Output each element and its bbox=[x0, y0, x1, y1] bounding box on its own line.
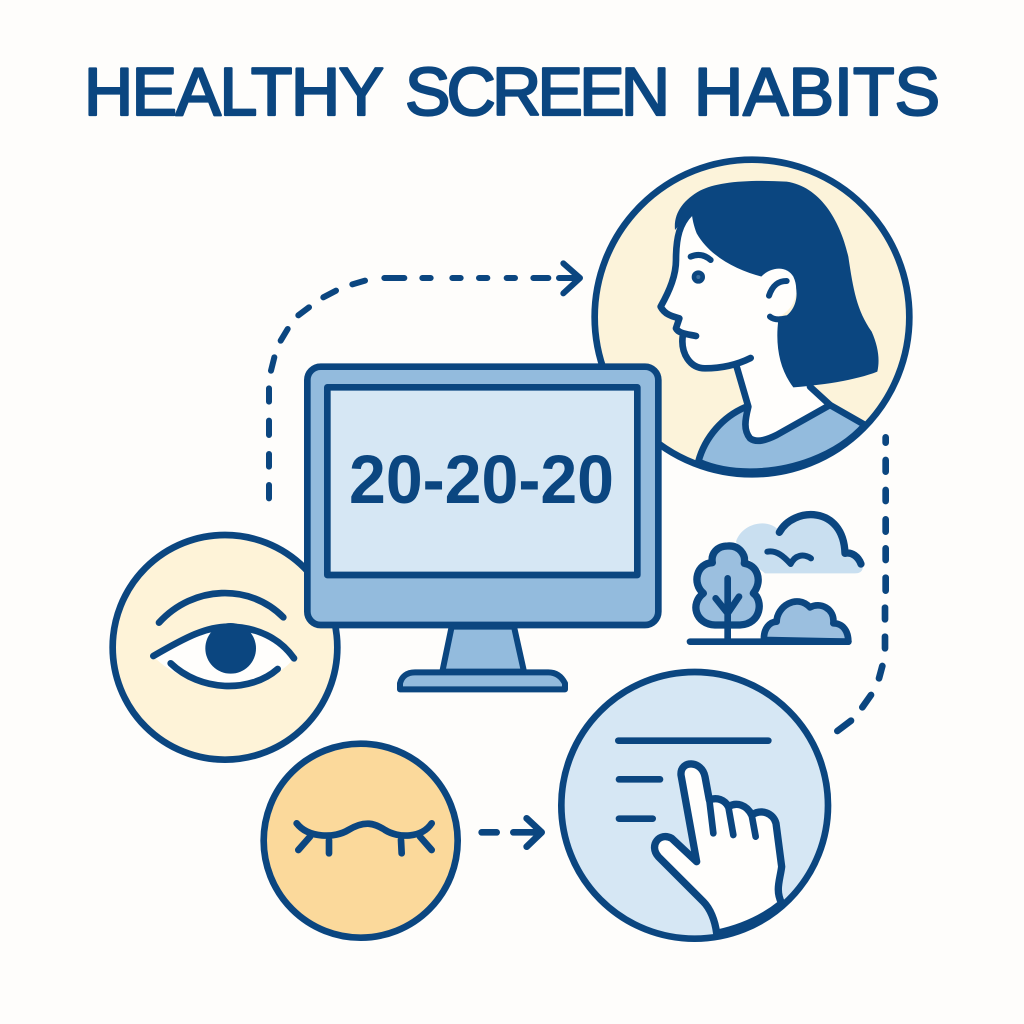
title: HABITS bbox=[694, 54, 940, 130]
closed eyelid and lashes bbox=[297, 823, 432, 853]
text lines bbox=[618, 741, 768, 819]
panel: person profile circle bbox=[595, 160, 909, 474]
face and neck bbox=[661, 213, 830, 441]
monitor base bbox=[400, 672, 565, 689]
hair bbox=[675, 181, 879, 387]
arrow: dashed path from monitor area to person bbox=[269, 263, 580, 498]
arrow: closed eye to hand bbox=[482, 818, 542, 847]
ear detail bbox=[769, 281, 787, 319]
panel: open eye circle bbox=[113, 535, 337, 760]
screen label: 20-20-20 bbox=[349, 441, 614, 518]
ear bbox=[761, 269, 796, 317]
hand bbox=[655, 764, 782, 933]
panel: monitor showing 20-20-20 bbox=[307, 367, 658, 689]
pupil bbox=[205, 623, 256, 674]
finger lines bbox=[709, 800, 756, 837]
bird bbox=[767, 551, 811, 564]
lower eyelid bbox=[171, 663, 278, 686]
icon: nature scene with tree, bush, cloud and bird bbox=[690, 515, 863, 642]
eyebrow bbox=[159, 593, 283, 623]
face outline bbox=[661, 213, 830, 441]
shirt bbox=[698, 405, 865, 472]
monitor stand bbox=[442, 627, 524, 672]
monitor screen bbox=[327, 387, 637, 575]
bush bbox=[764, 601, 848, 642]
upper eyelid bbox=[153, 627, 294, 658]
title: HEALTHY bbox=[84, 54, 384, 130]
eyebrow bbox=[691, 255, 711, 260]
cloud bbox=[736, 515, 863, 573]
tree trunk bbox=[716, 578, 739, 640]
cloud outline bbox=[779, 515, 861, 564]
panel: closed eye circle bbox=[264, 744, 542, 938]
title bbox=[84, 54, 940, 130]
arrow: dashed path from person to hand bbox=[837, 437, 886, 731]
panel: hand tapping circle bbox=[561, 672, 828, 939]
ground bbox=[690, 632, 848, 652]
eye bbox=[694, 273, 703, 281]
tree bbox=[696, 546, 759, 625]
monitor body bbox=[307, 367, 658, 625]
eye white bbox=[153, 626, 294, 684]
title: SCREEN bbox=[405, 54, 670, 130]
